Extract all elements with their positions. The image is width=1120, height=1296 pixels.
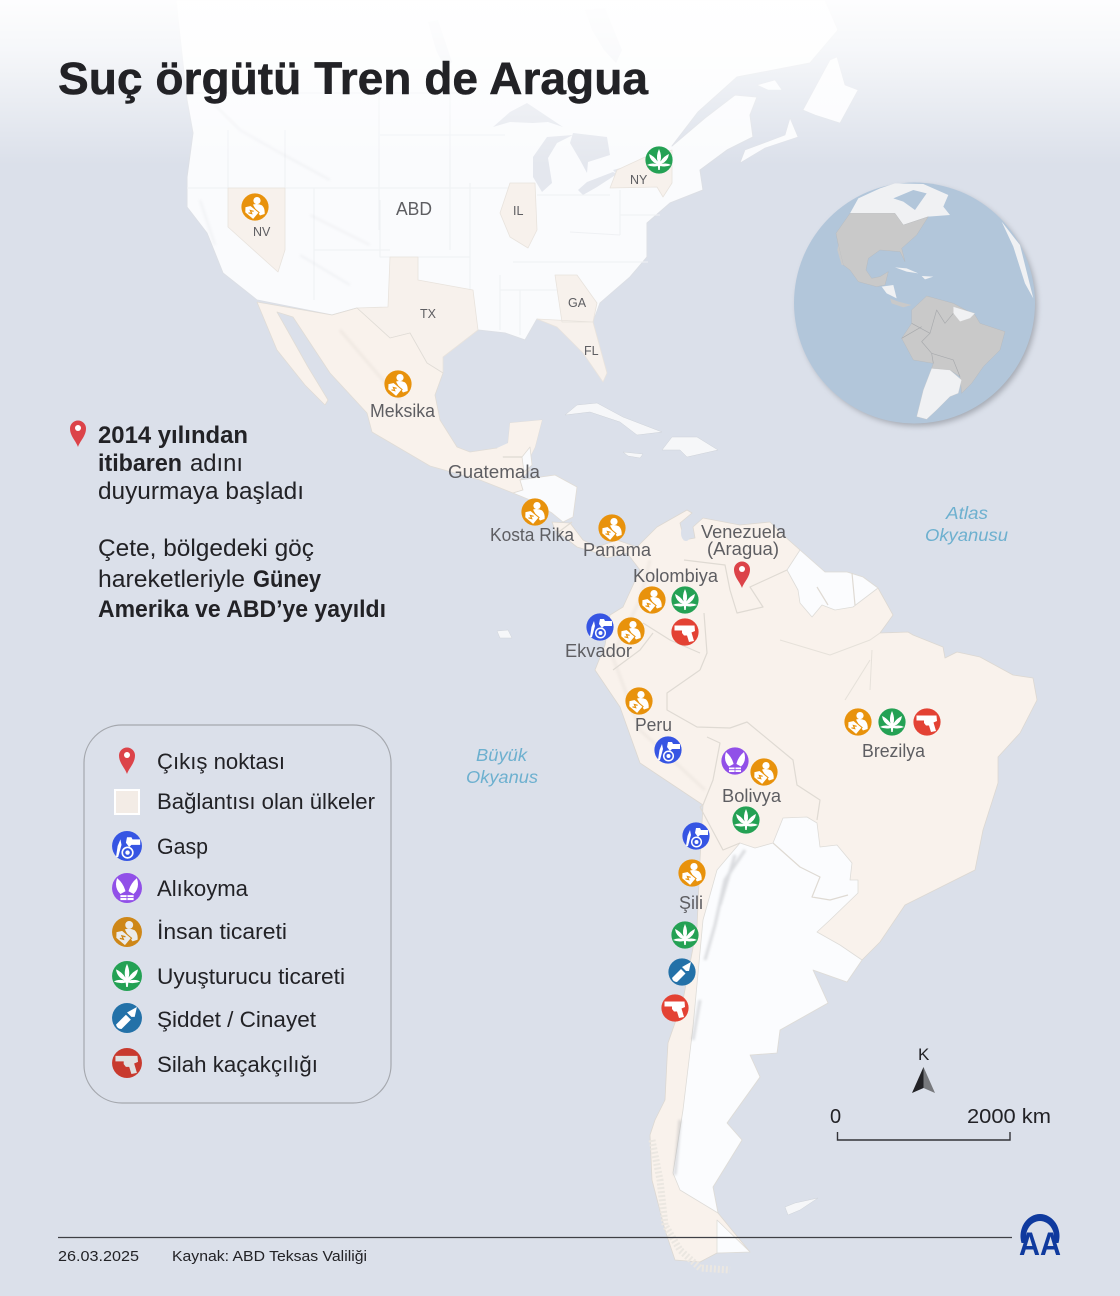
landmass: Mexico and Guatemala — [257, 302, 542, 493]
Great Lakes — [493, 103, 645, 195]
north arrow — [912, 1045, 935, 1093]
logo: AA — [1019, 1214, 1061, 1262]
Atlantic Canada islands — [740, 57, 858, 163]
US state borders — [187, 93, 660, 335]
Lake Maracaibo — [681, 525, 691, 541]
South American borders — [503, 457, 855, 900]
map labels: states and countries: Şili — [679, 893, 703, 913]
Argentina, Paraguay and Uruguay — [673, 817, 862, 1253]
map labels: states and countries: Kolombiya — [633, 566, 719, 586]
map labels: states and countries: TX — [420, 307, 437, 321]
north arrow: K — [918, 1045, 930, 1064]
map: North America and South America — [176, 0, 1037, 1270]
ocean labels — [466, 503, 1008, 787]
legend: detention: Alıkoyma — [157, 876, 249, 901]
map marker: origin pin Aragua — [734, 562, 750, 588]
intro text block: adını — [190, 450, 243, 477]
map labels: states and countries: IL — [513, 204, 523, 218]
map labels: states and countries: NV — [253, 225, 271, 239]
top white fade — [0, 0, 1120, 165]
intro text block: Çete, bölgedeki göç — [98, 535, 314, 562]
map labels: states and countries: NY — [630, 173, 648, 187]
legend: violence and murder: Şiddet / Cinayet — [157, 1007, 316, 1032]
intro text block: hareketleriyle — [98, 566, 245, 593]
map labels: states and countries: Meksika — [370, 401, 436, 421]
legend: arms smuggling — [112, 1048, 318, 1078]
map labels: states and countries: Bolivya — [722, 786, 782, 806]
legend panel — [84, 725, 391, 1103]
map markers: drug trafficking — [645, 146, 906, 949]
logo: AA: AA — [1019, 1226, 1061, 1262]
landmass: South America — [552, 510, 1037, 1262]
map markers: human trafficking — [241, 193, 872, 887]
ocean labels: Atlas — [945, 503, 988, 523]
ocean labels: Büyük — [476, 745, 528, 765]
footer source: Kaynak: ABD Teksas Valiliği — [172, 1249, 367, 1265]
legend: origin point: Çıkış noktası — [157, 749, 285, 774]
map markers: extortion — [586, 613, 710, 850]
map marker: violence and murder — [668, 958, 696, 986]
map labels: states and countries: Peru — [635, 715, 672, 735]
map labels: states and countries: Kosta Rika — [490, 525, 575, 545]
legend: detention — [112, 873, 249, 903]
intro text block — [70, 420, 386, 623]
intro text block: Güney — [253, 566, 322, 593]
legend: arms smuggling: Silah kaçakçılığı — [157, 1052, 318, 1077]
legend: extortion: Gasp — [157, 834, 208, 859]
legend: extortion — [112, 831, 208, 861]
map labels: states and countries: FL — [584, 344, 599, 358]
map markers: arms smuggling — [661, 618, 941, 1022]
landmass: Canada and USA — [176, 0, 838, 373]
legend: violence and murder — [112, 1003, 316, 1033]
legend: drug trafficking — [112, 961, 345, 991]
intro text block: duyurmaya başladı — [98, 478, 304, 505]
intro text block: 2014 yılından — [98, 422, 248, 449]
map marker: detention — [721, 747, 749, 775]
Chilean archipelago — [652, 1140, 730, 1270]
Yucatan fill — [497, 420, 542, 457]
scale bar — [830, 1106, 1051, 1140]
legend: human trafficking — [112, 917, 287, 947]
scale bar: 0 — [830, 1106, 841, 1128]
map labels: states and countries: Brezilya — [862, 741, 926, 761]
icon: intro pin — [70, 420, 86, 447]
Caribbean and other islands — [497, 403, 818, 1215]
landmass: Belize Honduras and Nicaragua — [513, 447, 577, 522]
intro text block: itibaren — [98, 450, 182, 477]
ocean labels: Okyanusu — [925, 525, 1008, 545]
footer line — [58, 1236, 1012, 1238]
footer date: 26.03.2025 — [58, 1249, 139, 1265]
intro text block: Amerika ve ABD’ye yayıldı — [98, 596, 386, 623]
Amazon river — [780, 633, 880, 700]
legend: connected countries: Bağlantısı olan ülkeler — [157, 789, 375, 814]
map labels: states and countries: ABD — [396, 199, 432, 219]
title: Suç örgütü Tren de Aragua — [58, 53, 649, 104]
highlighted states NV IL TX GA FL NY — [228, 150, 672, 382]
legend: drug trafficking: Uyuşturucu ticareti — [157, 964, 345, 989]
map labels: states and countries: Panama — [583, 540, 652, 560]
map labels: states and countries: (Aragua) — [707, 539, 779, 559]
Hudson James Bay and northern lakes — [428, 8, 622, 68]
map labels: states and countries — [253, 173, 926, 913]
Andes shading — [675, 850, 745, 1175]
Rocky Mountains texture — [200, 105, 370, 285]
map labels: states and countries: Guatemala — [448, 462, 541, 482]
map labels: states and countries: Venezuela — [701, 522, 787, 542]
legend: human trafficking: İnsan ticareti — [157, 919, 287, 944]
ocean labels: Okyanus — [466, 767, 538, 787]
Guianas — [787, 550, 878, 617]
map labels: states and countries: GA — [568, 296, 587, 310]
map labels: states and countries: Ekvador — [565, 641, 632, 661]
globe inset — [794, 182, 1037, 426]
scale bar: 2000 km — [967, 1106, 1051, 1128]
